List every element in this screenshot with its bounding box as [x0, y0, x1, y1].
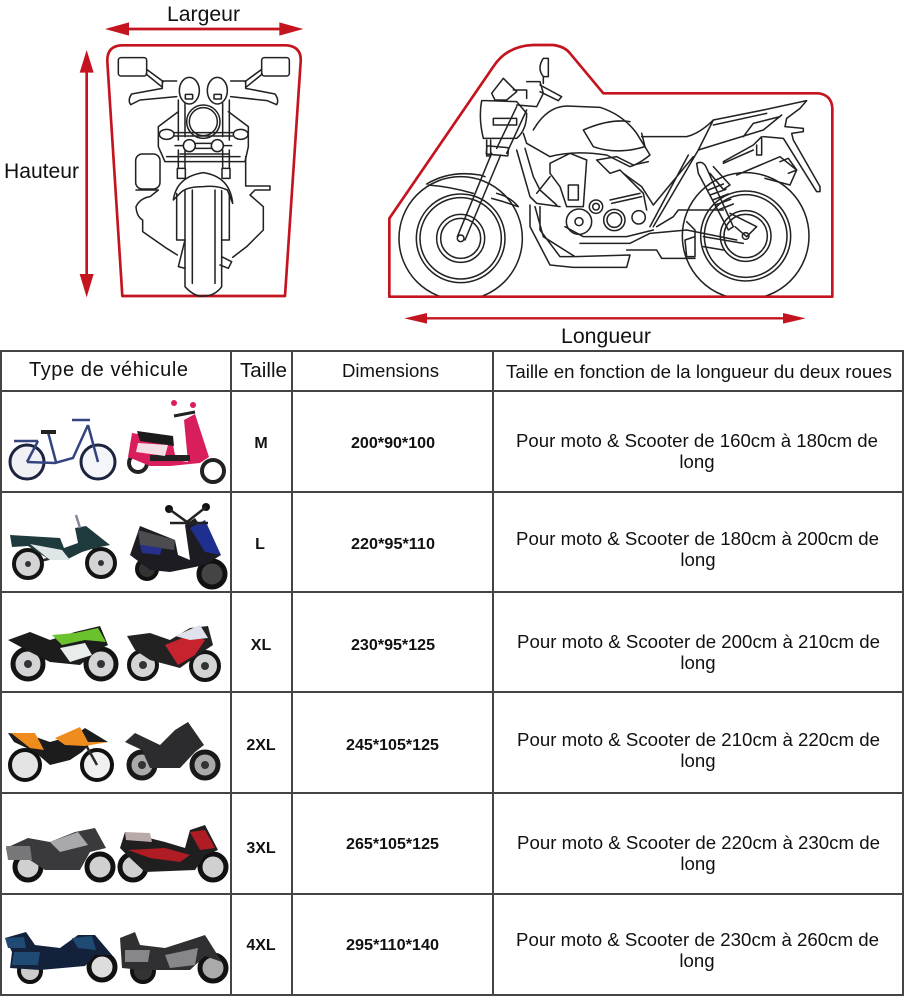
icon: motorcycle side line drawing [399, 58, 820, 300]
label: Largeur: Largeur [167, 3, 240, 26]
icon: underbone motorcycle [10, 515, 115, 578]
label: Hauteur: Hauteur [4, 160, 79, 183]
description: XL: Pour moto & Scooter de 200cm à 210cm de [517, 631, 880, 652]
dimensions: 4XL: 295*110*140 [346, 937, 439, 954]
icon: red sport motorcycle [127, 625, 219, 680]
row: 2XL [8, 722, 880, 780]
description: L: long [680, 549, 716, 570]
description: M: Pour moto & Scooter de 160cm à 180cm de [516, 430, 878, 451]
description: 4XL: Pour moto & Scooter de 230cm à 260cm de [516, 929, 879, 950]
icon: red maxi scooter [120, 825, 226, 880]
dimensions: 2XL: 245*105*125 [346, 737, 439, 754]
table header row: Taille en fonction de la longueur du deux roues [506, 361, 892, 382]
dimensions: XL: 230*95*125 [351, 637, 435, 654]
icon: blue scooter [130, 503, 225, 587]
size label: 4XL: 4XL [246, 937, 276, 954]
table header row [29, 359, 892, 382]
description: L [516, 528, 879, 570]
description: 2XL: Pour moto & Scooter de 210cm à 220cm de [517, 729, 880, 750]
panel: side view diagram [389, 45, 832, 348]
arrow: width [105, 22, 303, 36]
description: 3XL: Pour moto & Scooter de 220cm à 230cm de [517, 832, 880, 853]
description: M: long [679, 451, 715, 472]
size label: 2XL: 2XL [246, 737, 276, 754]
cover outline: front [107, 45, 301, 296]
table: size chart [0, 351, 904, 995]
table header row: Taille [240, 360, 287, 382]
description: 2XL: long [680, 750, 716, 771]
size label: XL: XL [251, 637, 271, 654]
icon: pink scooter [128, 400, 224, 482]
icon: orange dirt bike [8, 727, 112, 780]
description: XL: long [680, 652, 716, 673]
description: 3XL: long [680, 853, 716, 874]
row: M [10, 400, 878, 482]
description: 4XL [516, 929, 879, 971]
description: XL [517, 631, 880, 673]
size label: L: L [255, 536, 265, 553]
dimensions: L: 220*95*110 [351, 536, 435, 553]
description: 3XL [517, 832, 880, 874]
icon: bicycle [10, 420, 115, 479]
row: XL [8, 625, 880, 680]
description: 4XL: long [679, 950, 715, 971]
table header row: Dimensions [342, 360, 439, 381]
description: M [516, 430, 878, 472]
icon: grey touring motorcycle [6, 828, 113, 880]
arrow: length [404, 313, 806, 324]
description: L: Pour moto & Scooter de 180cm à 200cm de [516, 528, 879, 549]
icon: black naked motorcycle [125, 722, 218, 778]
icon: green sport motorcycle [8, 626, 116, 679]
description: 2XL [517, 729, 880, 771]
arrow: height [80, 50, 94, 297]
table header row: Type de véhicule [29, 359, 188, 381]
dimensions: M: 200*90*100 [351, 435, 435, 452]
row: 3XL [6, 825, 880, 880]
icon: motorcycle front line drawing [118, 58, 289, 296]
row: 4XL [5, 929, 879, 982]
size label: M: M [254, 435, 268, 452]
label: Longueur: Longueur [561, 325, 651, 348]
table grid [0, 351, 904, 995]
cover outline: side [389, 45, 832, 297]
size label: 3XL: 3XL [246, 840, 276, 857]
row: L [10, 503, 879, 587]
dimensions: 3XL: 265*105*125 [346, 836, 439, 853]
icon: blue cruiser [5, 932, 115, 982]
panel: front view diagram [4, 3, 303, 297]
icon: silver touring motorcycle [120, 932, 226, 982]
